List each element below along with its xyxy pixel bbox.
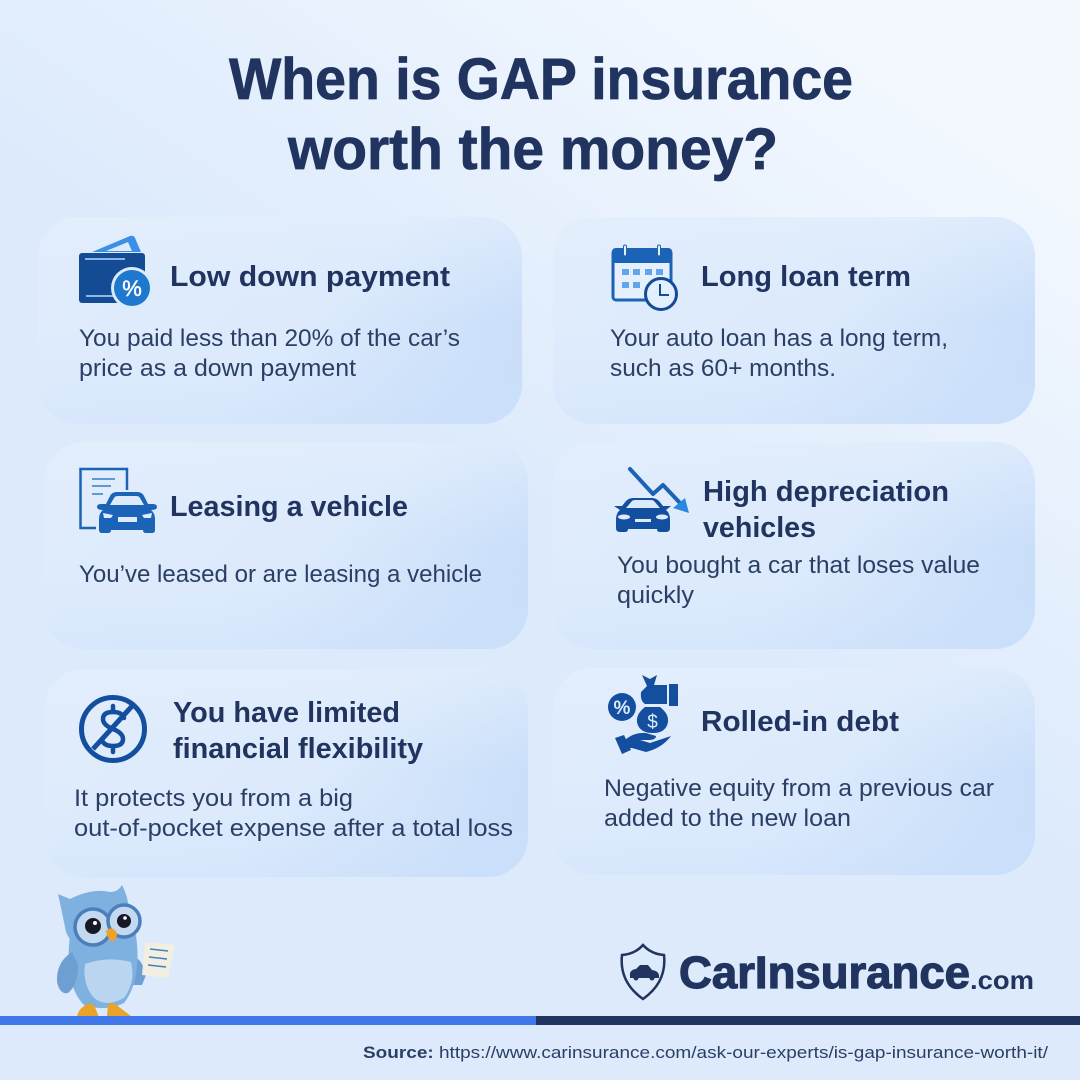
heading — [703, 476, 949, 544]
beak — [106, 928, 117, 942]
footer bar — [0, 1016, 1080, 1025]
body text — [79, 325, 460, 382]
logo: CarInsurance.com — [622, 945, 1034, 999]
heading: High depreciation — [703, 476, 949, 508]
body text: You bought a car that loses value — [617, 552, 980, 579]
body text: Your auto loan has a long term, — [610, 325, 948, 352]
body text: price as a down payment — [79, 355, 356, 382]
body text: quickly — [617, 582, 694, 609]
icon: document with car — [80, 469, 157, 533]
heading: financial flexibility — [173, 733, 423, 765]
logo: CarInsurance.com: .com — [970, 965, 1034, 995]
body text: You’ve leased or are leasing a vehicle — [79, 561, 482, 588]
icon: shield with car — [622, 945, 664, 999]
body text — [617, 552, 980, 609]
heading: vehicles — [703, 512, 816, 544]
body text: You paid less than 20% of the car’s — [79, 325, 460, 352]
panel: low down payment — [38, 217, 522, 424]
panel: leasing a vehicle — [44, 442, 528, 649]
body text — [610, 325, 948, 382]
body — [69, 935, 138, 1008]
right wing — [130, 955, 146, 985]
heading: Low down payment — [170, 261, 451, 293]
eyes — [85, 918, 101, 934]
icon: car with falling arrow — [614, 469, 689, 532]
icon: crossed-out dollar — [82, 698, 144, 760]
body text: It protects you from a big — [74, 785, 353, 812]
belly — [84, 959, 132, 1003]
heading: Rolled-in debt — [701, 706, 900, 738]
heading: Leasing a vehicle — [170, 491, 408, 523]
head — [58, 885, 138, 953]
icon: wallet with percent badge — [79, 236, 153, 309]
panel: limited financial flexibility — [44, 669, 528, 877]
source line: Source: https://www.carinsurance.com/ask-our-experts/is-gap-insurance-worth-it/ — [363, 1043, 1048, 1062]
panel: long loan term — [553, 217, 1035, 424]
body text: Negative equity from a previous car — [604, 775, 994, 802]
icon: money bag in hand with percent — [608, 675, 678, 754]
panel: high depreciation vehicles — [553, 442, 1035, 649]
body text — [74, 785, 513, 842]
wordmark: CarInsurance — [679, 947, 970, 998]
paper — [142, 942, 175, 978]
feet — [77, 1003, 131, 1018]
heading — [173, 697, 423, 765]
title — [229, 47, 853, 182]
icon: money bag in hand with percent: $ — [647, 712, 658, 733]
body text: added to the new loan — [604, 805, 851, 832]
body text — [604, 775, 994, 832]
body text: such as 60+ months. — [610, 355, 836, 382]
icon: owl mascot holding a document — [57, 885, 175, 1018]
title: worth the money? — [287, 117, 778, 182]
heading: You have limited — [173, 697, 400, 729]
panel: rolled-in debt — [553, 668, 1035, 875]
body text: out-of-pocket expense after a total loss — [74, 815, 513, 842]
icon: money bag in hand with percent: % — [614, 698, 631, 719]
title: When is GAP insurance — [229, 47, 853, 112]
icon: wallet with percent badge: % — [122, 276, 142, 301]
icon: calendar with clock — [612, 245, 676, 310]
heading: Long loan term — [701, 261, 911, 293]
glasses — [75, 909, 111, 945]
left wing — [57, 952, 78, 993]
